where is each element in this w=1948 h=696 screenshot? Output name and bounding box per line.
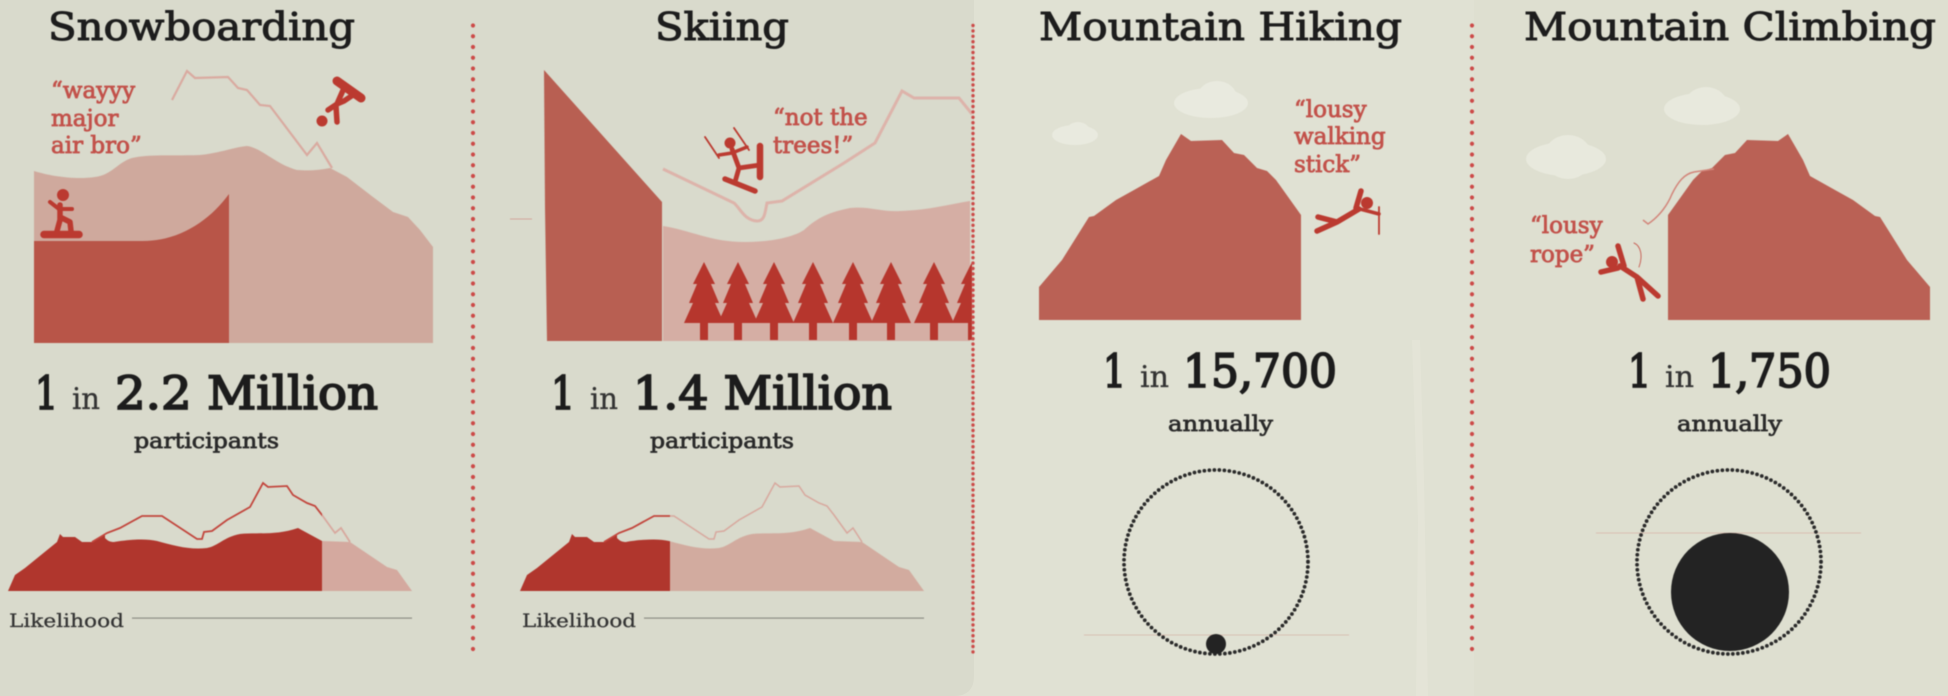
- panel: snowboarding: [8, 5, 433, 632]
- title: skiing: Skiing: [655, 5, 789, 49]
- mountain: [1039, 134, 1301, 320]
- title: snowboarding: Snowboarding: [48, 5, 355, 49]
- likelihood mountain chart: [8, 483, 412, 591]
- mountain outline line: [663, 91, 972, 221]
- quote: not the trees: trees!”: [773, 133, 853, 159]
- pine trees: [684, 262, 992, 340]
- quote: not the trees: “not the: [773, 105, 868, 131]
- likelihood label: Likelihood: [9, 610, 124, 632]
- icon: falling hiker: [1317, 191, 1379, 234]
- label: participants: participants: [650, 429, 794, 453]
- stat: 1 in 1,750: 1,750: [1708, 344, 1831, 398]
- climbing column tint: [1474, 0, 1948, 696]
- mountain: [1668, 134, 1930, 320]
- red reference line: [1084, 634, 1349, 636]
- stat: 1 in 1.4 million: 1.4 Million: [633, 366, 892, 420]
- stat: 1 in 2.2 million: 1: [35, 366, 58, 420]
- likelihood axis: [132, 618, 412, 619]
- title: mountain hiking: Mountain Hiking: [1039, 5, 1402, 49]
- stat: 1 in 15,700: 1: [1103, 344, 1126, 398]
- cloud small: [1052, 122, 1098, 145]
- title: mountain climbing: Mountain Climbing: [1524, 5, 1936, 49]
- divider dots 1: [471, 26, 475, 652]
- red reference line: [1596, 532, 1861, 534]
- quote: lousy rope: rope”: [1530, 242, 1595, 268]
- left panel backdrop: [0, 0, 974, 696]
- quote: lousy walking stick: “lousy: [1294, 97, 1367, 123]
- panel: skiing: [510, 5, 992, 632]
- icon: falling climber: [1601, 243, 1658, 299]
- stat: 1 in 15,700: 15,700: [1183, 344, 1337, 398]
- panel: mountain hiking: [1039, 5, 1402, 654]
- likelihood label: Likelihood: [522, 610, 636, 632]
- panel: mountain climbing: [1524, 5, 1936, 654]
- quote: wayyy major air bro: major: [51, 106, 119, 132]
- mountain outline line: [172, 71, 332, 168]
- likelihood mountain chart: [520, 483, 924, 591]
- quote: wayyy major air bro: “wayyy: [51, 78, 135, 104]
- divider dots 2: [971, 26, 975, 652]
- proportional dot: [1206, 634, 1226, 654]
- paper streak: [1412, 340, 1428, 696]
- cloud large: [1664, 87, 1740, 125]
- background hill: [663, 201, 970, 341]
- icon: airborne snowboarder: [316, 81, 361, 126]
- ski slope wedge: [544, 70, 662, 341]
- stat: 1 in 15,700: [1103, 344, 1337, 398]
- proportional dot: [1671, 533, 1789, 651]
- quote: lousy walking stick: stick”: [1294, 152, 1361, 178]
- likelihood axis: [644, 618, 924, 619]
- quote: wayyy major air bro: air bro”: [51, 133, 142, 159]
- icon: standing snowboarder: [44, 189, 79, 234]
- red tick: [510, 218, 532, 220]
- quote: lousy walking stick: walking: [1294, 124, 1386, 150]
- icon: crashing skier: [705, 128, 760, 191]
- label: annually: annually: [1677, 412, 1782, 436]
- dotted circle: [1124, 470, 1308, 654]
- rope line: [1643, 169, 1714, 224]
- cloud small: [1526, 135, 1606, 179]
- background mountain: [34, 146, 433, 343]
- dotted circle: [1637, 470, 1821, 654]
- divider dots 3: [1470, 26, 1474, 652]
- stat: 1 in 2.2 million: in: [72, 382, 100, 417]
- stat: 1 in 1,750: in: [1665, 360, 1694, 395]
- quote: lousy rope: “lousy: [1530, 213, 1603, 239]
- label: participants: participants: [134, 429, 279, 453]
- stat: 1 in 1,750: [1628, 344, 1831, 398]
- stat: 1 in 1.4 million: 1: [551, 366, 575, 420]
- label: annually: annually: [1168, 412, 1273, 436]
- stat: 1 in 1.4 million: in: [590, 382, 618, 417]
- stat: 1 in 2.2 million: 2.2 Million: [115, 366, 378, 420]
- stat: 1 in 1,750: 1: [1628, 344, 1651, 398]
- halfpipe: [34, 194, 229, 343]
- cloud large: [1174, 81, 1248, 118]
- stat: 1 in 15,700: in: [1140, 360, 1169, 395]
